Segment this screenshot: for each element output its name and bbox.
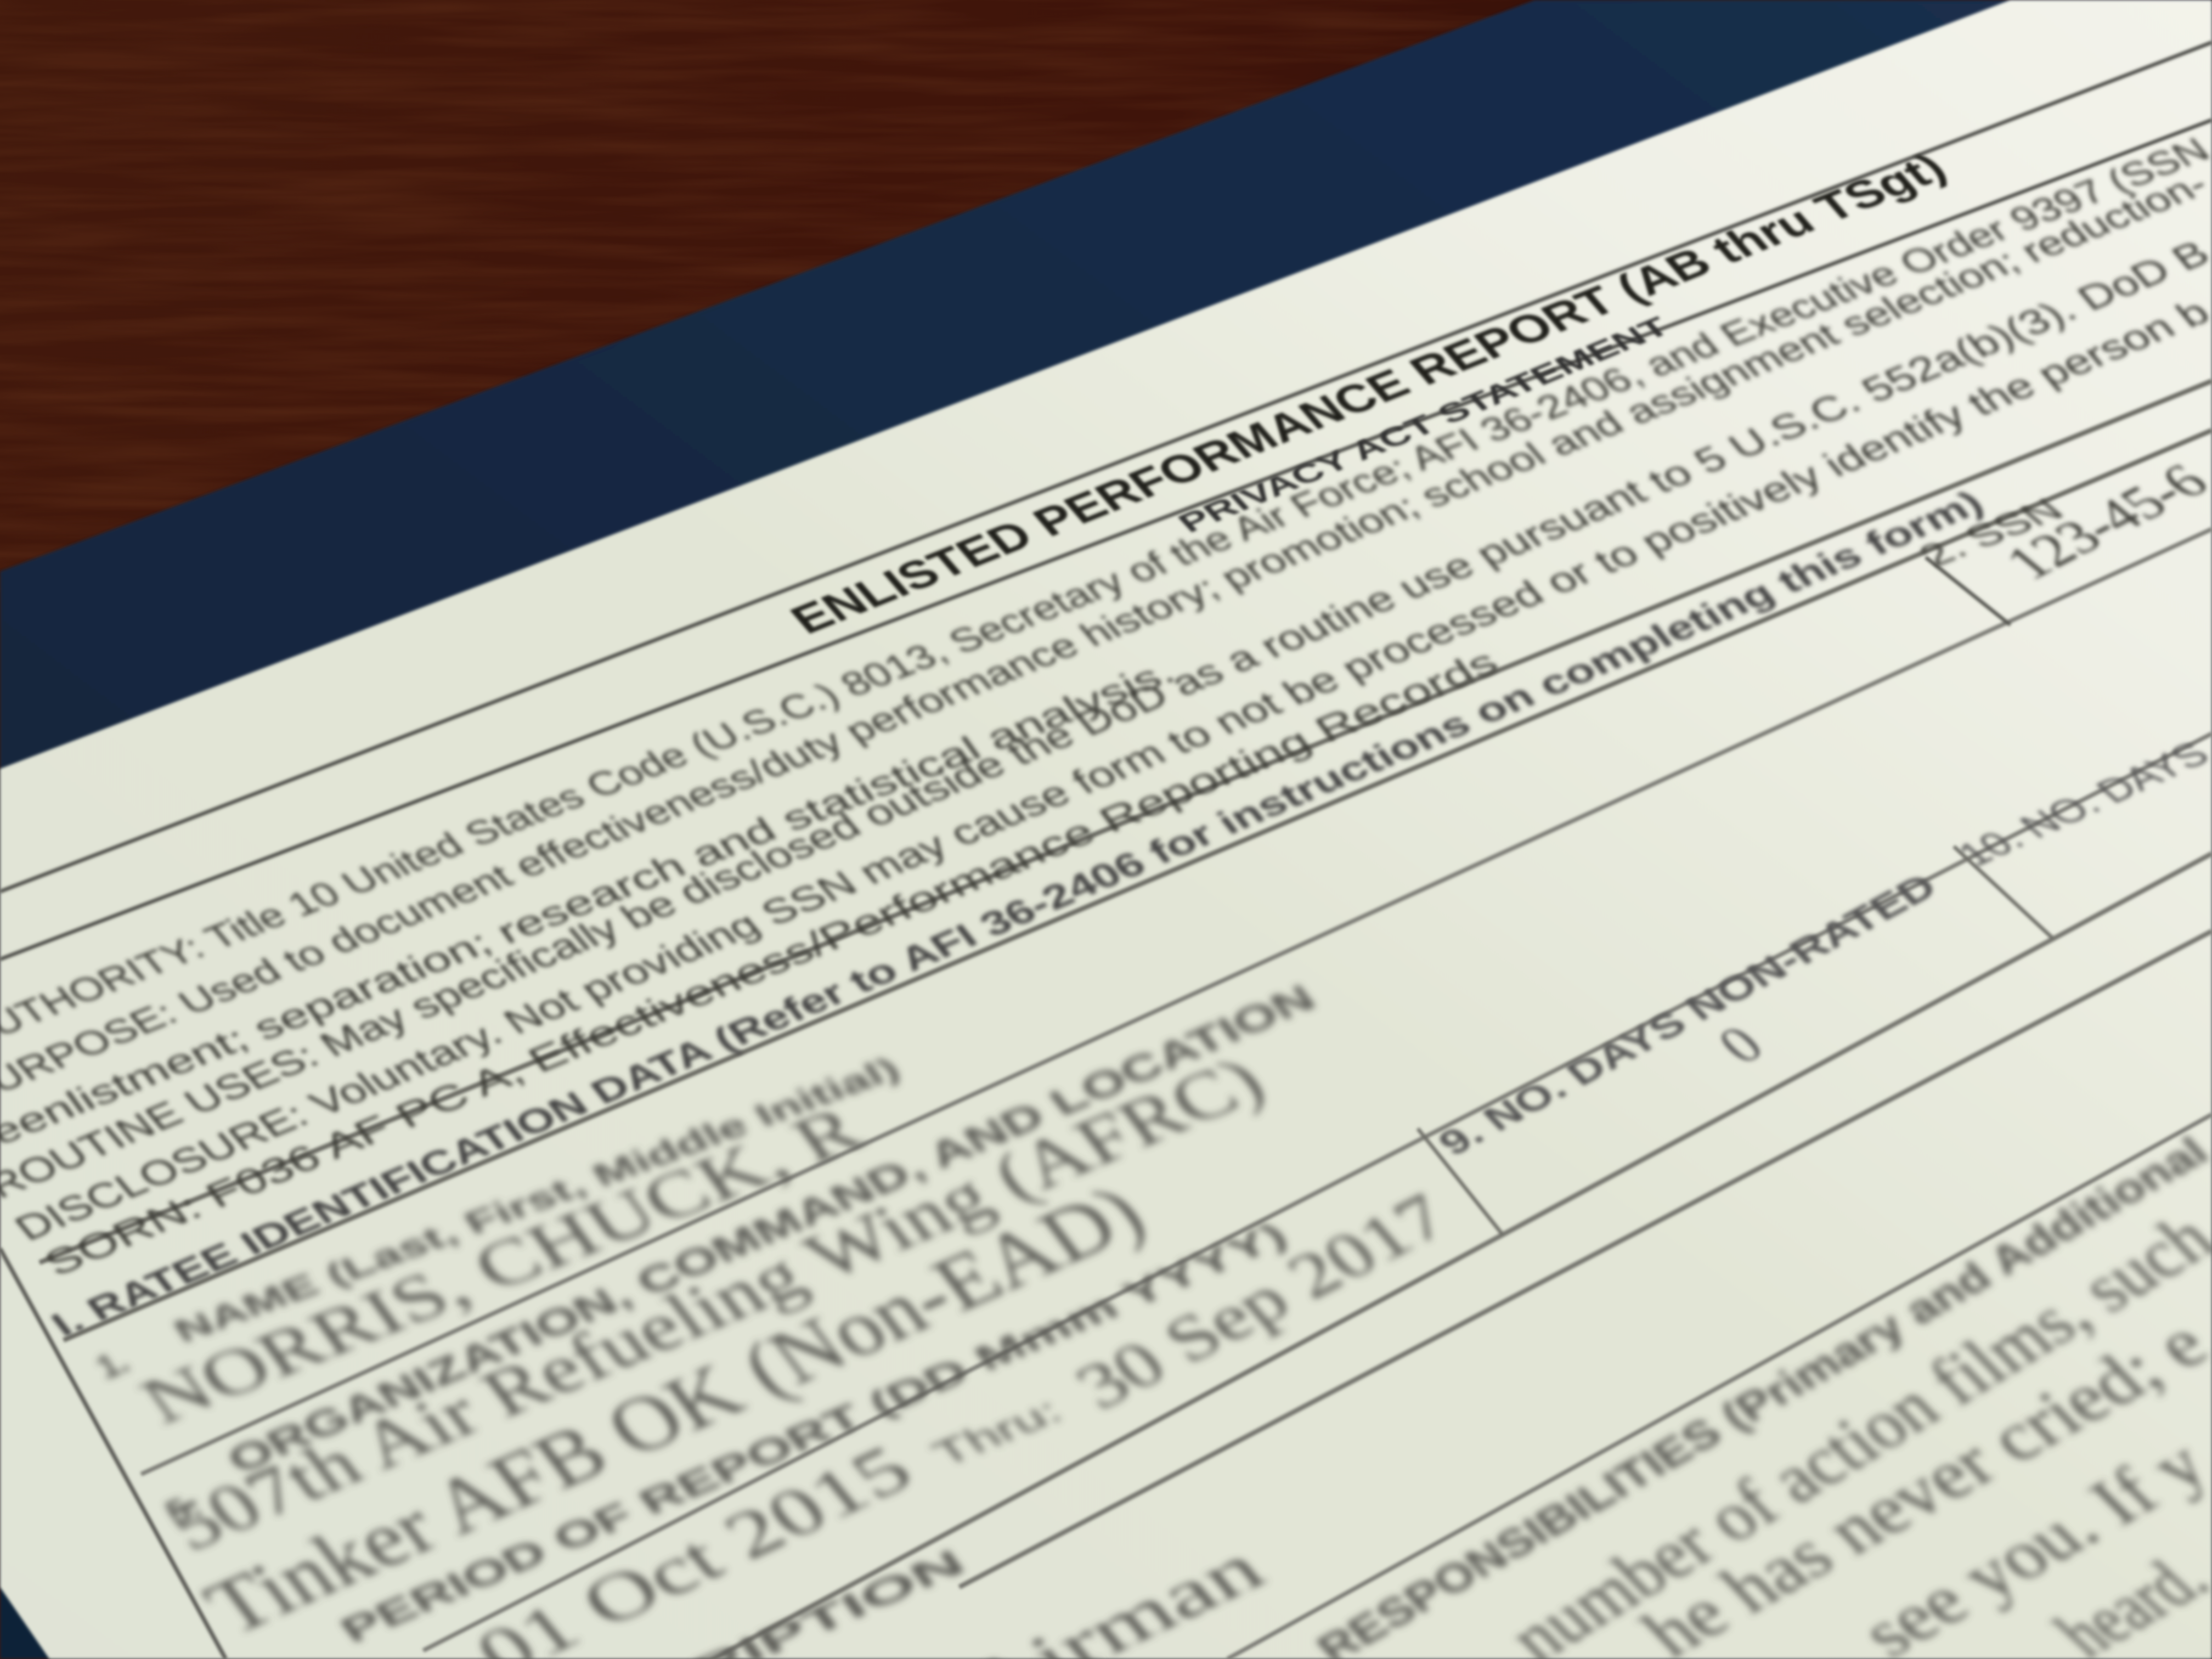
SSN value: 123-45-6 [1991, 454, 2212, 590]
organization label: ORGANIZATION, COMMAND, AND LOCATION [218, 977, 1324, 1481]
location value: Tinker AFB OK (Non-EAD) [188, 1168, 1161, 1651]
section header: I. RATEE IDENTIFICATION DATA (Refer to AFI 36-2406 for instructions on completing this form) [43, 483, 1991, 1344]
purpose line: URPOSE: Used to document effectiveness/duty performance history; promotion; school and assignment selection; reduction- [0, 165, 2212, 1099]
period thru value: 30 Sep 2017 [1060, 1181, 1463, 1423]
name label: NAME (Last, First, Middle Initial) [166, 1051, 907, 1349]
thru label: Thru: [923, 1391, 1070, 1474]
item 1 number: 1. [89, 1344, 136, 1386]
title: ENLISTED PERFORMANCE REPORT (AB thru TSgt) [780, 145, 1956, 642]
days supervision label: 10. NO. DAYS [1948, 735, 2212, 873]
privacy heading: PRIVACY ACT STATEMENT [1171, 312, 1677, 538]
item 5 number: 5. [159, 1487, 209, 1533]
SORN line: SORN: F036 AF PC A, Effectiveness/Performance Reporting Records [36, 642, 1506, 1283]
days non-rated label: 9. NO. DAYS NON-RATED [1430, 867, 1945, 1163]
routine uses line: ROUTINE USES: May specifically be disclosed outside the DoD as a routine use pursuant to 5 U.S.C. 552a(b)(3). DoD B [0, 234, 2212, 1205]
authority line: UTHORITY: Title 10 United States Code (U.S.C.) 8013, Secretary of the Air Force; AFI 36-2406, and Executive Order 9397 (SSN [0, 131, 2212, 1043]
name value: NORRIS, CHUCK, R [126, 1093, 876, 1437]
reenlistment line: eenlistment; separation; research and statistical analysis. [0, 652, 1182, 1152]
days non-rated value: 0 [1704, 1015, 1776, 1074]
SSN label: 2. SSN [1909, 492, 2073, 572]
duties heading: RESPONSIBILITIES (Primary and Additional [1307, 1128, 2212, 1659]
period label: PERIOD OF REPORT (DD Mmm YYYY) [331, 1215, 1295, 1650]
top text: title and privacy statement [780, 145, 1956, 642]
ratee data text [89, 977, 2212, 1659]
privacy act body text [0, 131, 2212, 1344]
disclosure line: DISCLOSURE: Voluntary. Not providing SSN may cause form to not be processed or to positively identify the person b [6, 292, 2212, 1248]
organization value: 507th Air Refueling Wing (AFRC) [152, 1042, 1279, 1565]
